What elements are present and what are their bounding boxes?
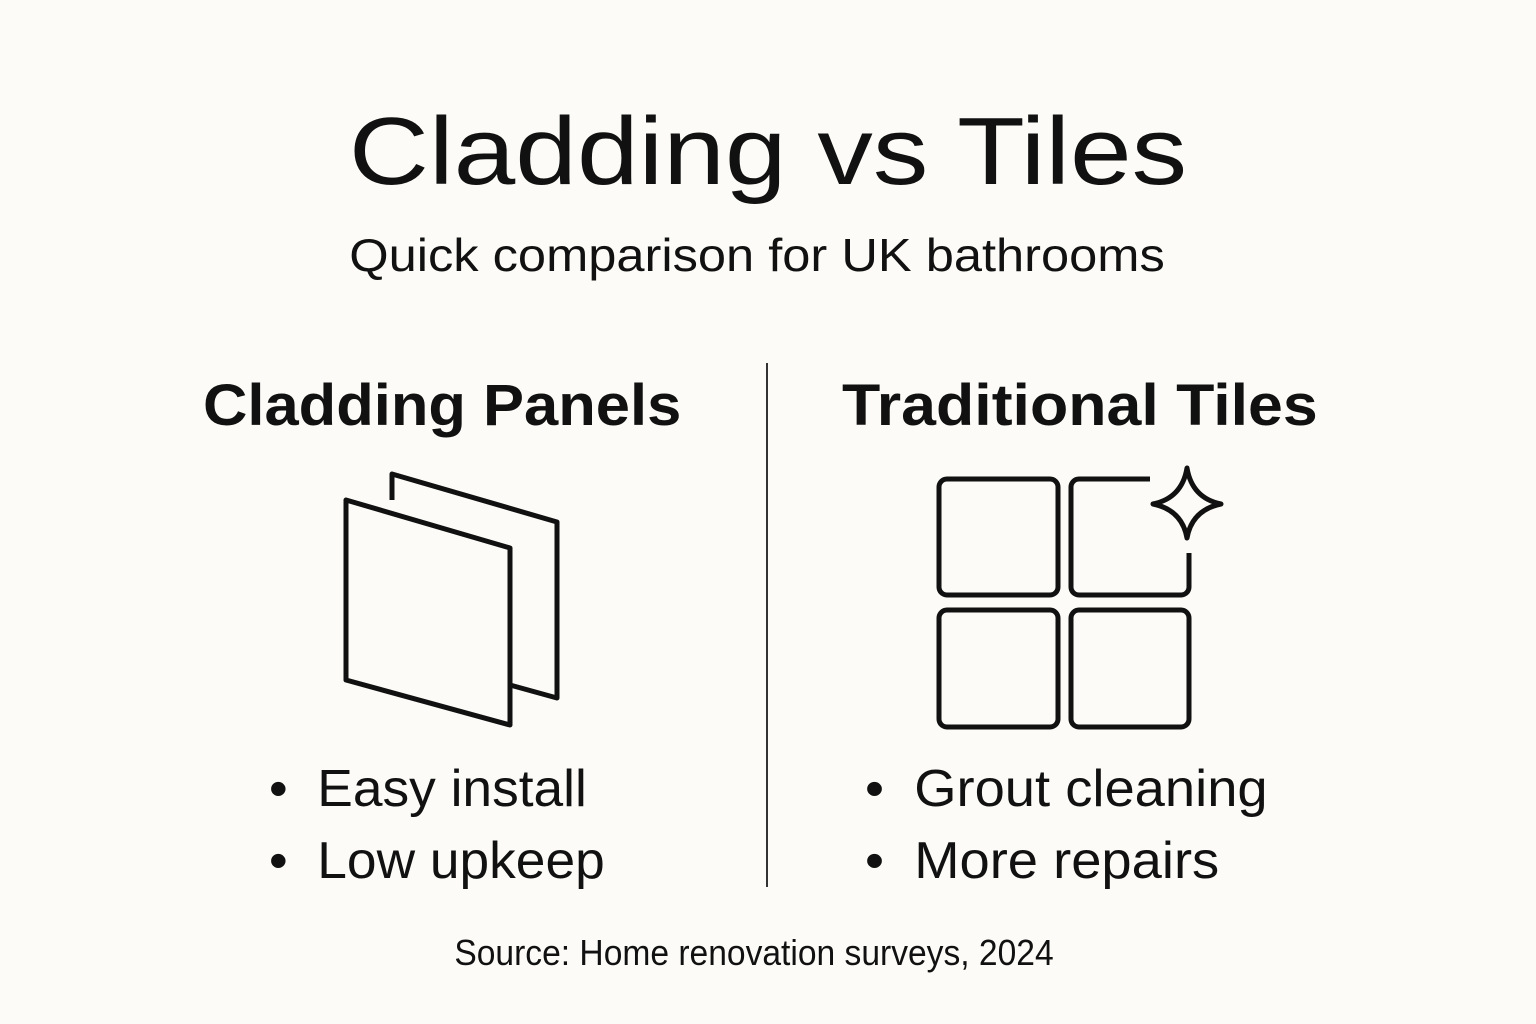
- list: tiles cons: [865, 760, 1268, 890]
- icon: tiles with sparkle: [936, 466, 1224, 730]
- title: Cladding vs Tiles: [349, 98, 1187, 205]
- heading: cladding panels: Cladding Panels: [203, 373, 681, 438]
- divider: [766, 363, 768, 887]
- list: tiles cons: • More repairs: [865, 832, 1219, 890]
- list: cladding pros: • Easy install: [269, 760, 587, 818]
- list: tiles cons: • Grout cleaning: [865, 760, 1268, 818]
- list: cladding pros: • Low upkeep: [269, 832, 605, 890]
- icon: cladding panels: [344, 472, 560, 728]
- heading: traditional tiles: Traditional Tiles: [842, 373, 1318, 438]
- source note: Source: Home renovation surveys, 2024: [454, 932, 1054, 973]
- subtitle: Quick comparison for UK bathrooms: [349, 229, 1165, 281]
- list: cladding pros: [269, 760, 605, 890]
